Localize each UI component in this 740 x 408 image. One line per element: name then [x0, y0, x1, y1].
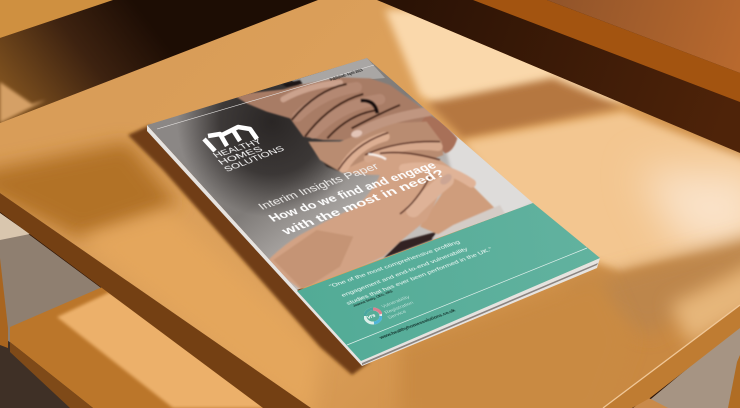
sunlight and shadow patches — [382, 6, 629, 108]
background: carpet and lower shelf — [0, 193, 740, 408]
lower shelf — [10, 285, 300, 408]
title block: with the most in need? — [277, 167, 448, 238]
sleeve — [432, 205, 507, 238]
quote attribution: Joanna Sealy, CEO, VRS — [352, 289, 394, 308]
upper fingers — [283, 83, 340, 99]
fingernail — [350, 130, 363, 138]
title block: Interim Insights Paper — [256, 161, 382, 212]
table edge highlight — [603, 305, 740, 408]
VRS name: Vulnerability — [380, 294, 412, 309]
black ring — [361, 101, 377, 113]
booklet cast shadow — [128, 125, 370, 375]
right carpet — [640, 325, 740, 408]
hands illustration — [233, 77, 507, 292]
upper arm — [233, 77, 433, 140]
logo: Healthy Homes Solutions — [204, 127, 286, 173]
website: www.healthyhomessolutions.co.uk — [377, 308, 457, 340]
VRS logo icon: vrs — [366, 313, 377, 321]
watch strap — [282, 80, 303, 87]
logo: Healthy Homes Solutions: SOLUTIONS — [222, 145, 286, 173]
front edge of table — [0, 193, 311, 408]
logo: Healthy Homes Solutions: HOMES — [216, 145, 265, 166]
forearm right — [420, 177, 495, 235]
VRS logo icon — [365, 309, 381, 323]
dark gap beneath hands — [383, 232, 437, 258]
finger creases — [292, 84, 400, 138]
band rule — [347, 248, 587, 345]
title block: How do we find and engage — [266, 159, 440, 224]
lower fingers — [343, 137, 385, 168]
top white rule — [157, 65, 374, 129]
silver ring — [368, 154, 386, 159]
quote: “One of the most comprehensive profiling — [328, 240, 462, 289]
teal band: engagement and end-to-end vulnerability — [340, 247, 470, 298]
VRS name: Registration — [383, 300, 416, 315]
teal band: studies that has ever been performed in the UK.” — [345, 247, 494, 306]
VRS name: Service — [386, 309, 408, 320]
left table leg — [0, 258, 8, 348]
logo: Healthy Homes Solutions: HEALTHY — [211, 137, 265, 159]
teal band — [297, 203, 600, 361]
title block — [256, 159, 448, 238]
lower hand shade — [273, 230, 353, 290]
VRS name — [380, 294, 416, 320]
page edges — [147, 125, 600, 366]
lower creases — [338, 133, 440, 214]
right back hand — [420, 115, 457, 153]
lower hand — [269, 153, 451, 289]
right front edge — [603, 305, 740, 408]
middle hand — [308, 122, 443, 173]
date line: Published: April 2023 — [328, 68, 364, 82]
photo backdrop — [290, 58, 385, 85]
booklet — [147, 58, 600, 366]
logo mark: house roofs — [204, 127, 257, 151]
cover photo — [147, 58, 533, 290]
